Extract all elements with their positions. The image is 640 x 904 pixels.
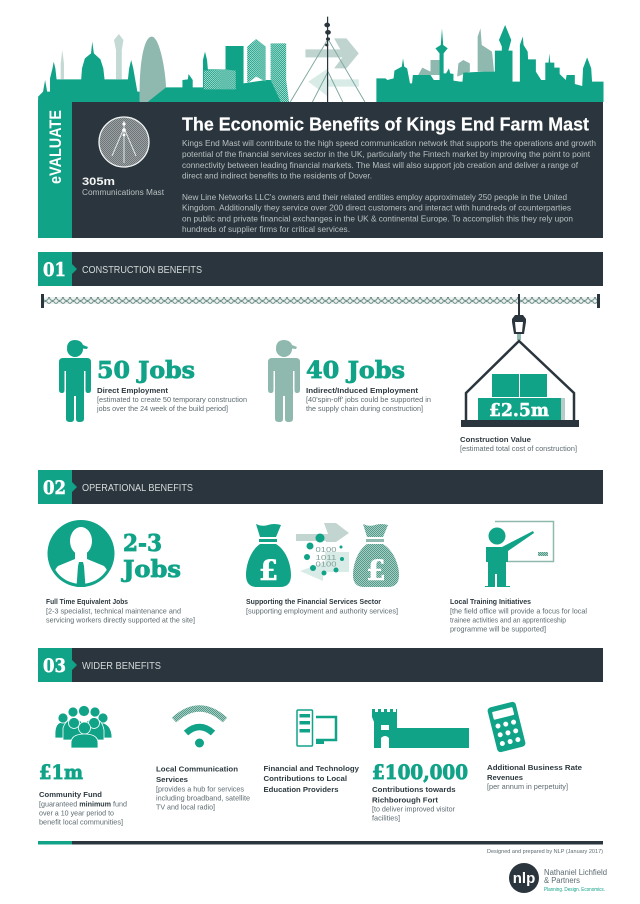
NLP logo xyxy=(509,863,607,893)
design credit: Designed and prepared by NLP (January 2017) xyxy=(487,849,603,855)
icon: calculator xyxy=(487,701,526,753)
education text: Education Providers xyxy=(264,785,338,794)
local communication text: including broadband, satellite xyxy=(156,794,250,802)
dark intro background xyxy=(72,102,603,238)
company name: & Partners xyxy=(544,876,580,885)
icon: money bag right: £ xyxy=(366,554,386,587)
icon: direct employment worker xyxy=(59,340,91,422)
footer rule xyxy=(38,841,603,844)
mast height: 305m xyxy=(82,176,115,188)
eVALUATE side tab xyxy=(38,100,73,238)
mast height: Communications Mast xyxy=(82,188,165,197)
company name: Planning. Design. Economics. xyxy=(544,887,605,893)
data exchange arrows and binary: 0100 xyxy=(316,547,337,554)
construction value text: Construction Value xyxy=(460,435,531,444)
education text xyxy=(264,764,360,794)
business rates text: [per annum in perpetuity] xyxy=(487,782,568,791)
section header: construction benefits: 01 xyxy=(43,259,66,281)
section header: construction benefits xyxy=(38,252,603,286)
direct employment text xyxy=(96,386,247,413)
section header: wider benefits: WIDER BENEFITS xyxy=(82,661,161,672)
section header: wider benefits: 03 xyxy=(43,655,66,677)
stacked boxes xyxy=(478,374,565,420)
construction value figure: £2.5m xyxy=(489,400,549,421)
icon: indirect employment worker xyxy=(268,340,300,422)
community fund text xyxy=(39,790,127,826)
community fund figure: £1m xyxy=(39,760,83,784)
intro text: New Line Networks LLC's owners and their related entities employ approximately 250 people in the United xyxy=(182,193,567,202)
business rates text xyxy=(487,763,582,791)
40 jobs figure: 40 Jobs xyxy=(306,357,405,384)
business rates text: Additional Business Rate xyxy=(487,763,582,772)
2-3 jobs figure: Jobs xyxy=(121,556,181,583)
indirect employment text: the supply chain during construction] xyxy=(306,404,423,413)
full time jobs text: [2-3 specialist, technical maintenance and xyxy=(46,606,181,616)
section header: operational benefits xyxy=(38,470,603,504)
full time jobs text: servicing workers directly supported at the site] xyxy=(46,616,195,624)
eVALUATE side tab: eVALUATE xyxy=(46,110,65,184)
mast height xyxy=(82,176,165,197)
company name xyxy=(544,868,607,893)
construction value text: [estimated total cost of construction] xyxy=(460,444,577,453)
100,000 figure: £100,000 xyxy=(372,760,468,784)
50 jobs figure: 50 Jobs xyxy=(97,357,195,384)
2-3 jobs figure: 2-3 xyxy=(123,530,162,557)
intro text: potential of the financial services sector in the UK, particularly the Fintech market by improving the point to point xyxy=(182,150,591,159)
intro text: connectivity between leading financial markets. The Mast will also support job creation and deliver a range of xyxy=(182,161,579,170)
direct employment text: [estimated to create 50 temporary construction xyxy=(97,395,247,404)
local communication text: Local Communication xyxy=(156,764,238,774)
section header: wider benefits xyxy=(38,648,603,682)
data exchange arrows and binary: 1011 xyxy=(316,555,337,562)
section header: construction benefits: CONSTRUCTION BENEFITS xyxy=(82,265,202,276)
direct employment text: Direct Employment xyxy=(97,386,168,395)
icon: money bag right xyxy=(353,524,399,587)
community fund text: Community Fund xyxy=(39,790,102,799)
intro text: hundreds of supplier firms for critical services. xyxy=(182,225,350,234)
icon: money bag left: £ xyxy=(259,554,278,587)
financial sector text: [supporting employment and authority services] xyxy=(246,606,398,616)
slings xyxy=(466,341,574,421)
icon: money bag left xyxy=(246,524,291,587)
indirect employment text: [40'spin-off' jobs could be supported in xyxy=(306,395,431,404)
company name: Nathaniel Lichfield xyxy=(544,868,607,877)
training text xyxy=(450,597,587,634)
London skyline xyxy=(38,34,289,110)
local communication text: TV and local radio] xyxy=(156,802,215,812)
full time jobs text: Full Time Equivalent Jobs xyxy=(46,597,128,606)
logo roundel: nlp xyxy=(513,870,535,887)
community fund text: over a 10 year period to xyxy=(39,808,114,818)
panel: introduction xyxy=(38,100,603,238)
education text: Financial and Technology xyxy=(264,764,360,773)
data exchange arrows and binary xyxy=(296,523,349,581)
training text: trainee activities and an apprenticeship xyxy=(450,616,566,624)
direct employment text: jobs over the 24 week of the build period] xyxy=(96,404,228,413)
training text: Local Training Initiatives xyxy=(450,597,531,606)
indirect employment text xyxy=(306,386,431,413)
2-3 jobs figure xyxy=(121,530,181,583)
community fund text: [guaranteed minimum fund xyxy=(39,800,127,808)
financial sector text xyxy=(246,597,398,616)
data exchange arrows and binary: 0100 xyxy=(316,562,337,568)
intro text: Kings End Mast will contribute to the high speed communication network that supports the operations and growth xyxy=(182,139,596,148)
local communication text xyxy=(156,764,250,812)
full time jobs text xyxy=(46,597,195,624)
title: The Economic Benefits of Kings End Farm Mast xyxy=(182,114,589,134)
business rates text: Revenues xyxy=(487,773,523,782)
icon: mast in circle xyxy=(99,117,149,167)
indirect employment text: Indirect/Induced Employment xyxy=(306,386,418,395)
richborough fort text: [to deliver improved visitor xyxy=(372,804,456,814)
training text: [the field office will provide a focus for local xyxy=(450,606,587,616)
crane truss xyxy=(41,294,600,308)
richborough fort text xyxy=(372,785,456,822)
base bar xyxy=(461,420,579,427)
richborough fort text: Richborough Fort xyxy=(372,796,438,804)
intro text: on public and private financial exchanges in the UK & continental Europe. To accomplish this they rely upon xyxy=(182,214,573,224)
richborough fort text: Contributions towards xyxy=(372,785,456,794)
community fund text: benefit local communities] xyxy=(39,818,123,826)
intro text: Kingdom. Additionally they service over 200 direct customers and interact with hundreds of counterparties xyxy=(182,204,571,212)
section header: operational benefits: 02 xyxy=(43,477,66,499)
icon: community group xyxy=(55,706,112,748)
mast with arrows xyxy=(290,17,365,102)
Frankfurt skyline xyxy=(376,25,604,102)
richborough fort text: facilities] xyxy=(372,814,400,822)
icon: castle xyxy=(372,709,469,748)
section header: operational benefits: OPERATIONAL BENEFITS xyxy=(82,483,193,494)
icon: employee portrait xyxy=(48,520,114,590)
icon: trainer at whiteboard xyxy=(485,522,554,587)
construction value text xyxy=(460,435,577,453)
intro text xyxy=(182,139,596,234)
hook block xyxy=(512,294,526,340)
crane hook and load xyxy=(461,294,579,427)
intro text: direct and indirect benefits to the residents of Dover. xyxy=(182,172,372,180)
icon: computer devices xyxy=(297,710,336,746)
local communication text: [provides a hub for services xyxy=(156,784,244,794)
local communication text: Services xyxy=(156,775,188,784)
financial sector text: Supporting the Financial Services Sector xyxy=(246,597,381,606)
education text: Contributions to Local xyxy=(264,774,347,783)
skyline illustration xyxy=(38,17,604,110)
training text: programme will be supported] xyxy=(450,624,546,634)
icon: wifi xyxy=(174,708,225,748)
